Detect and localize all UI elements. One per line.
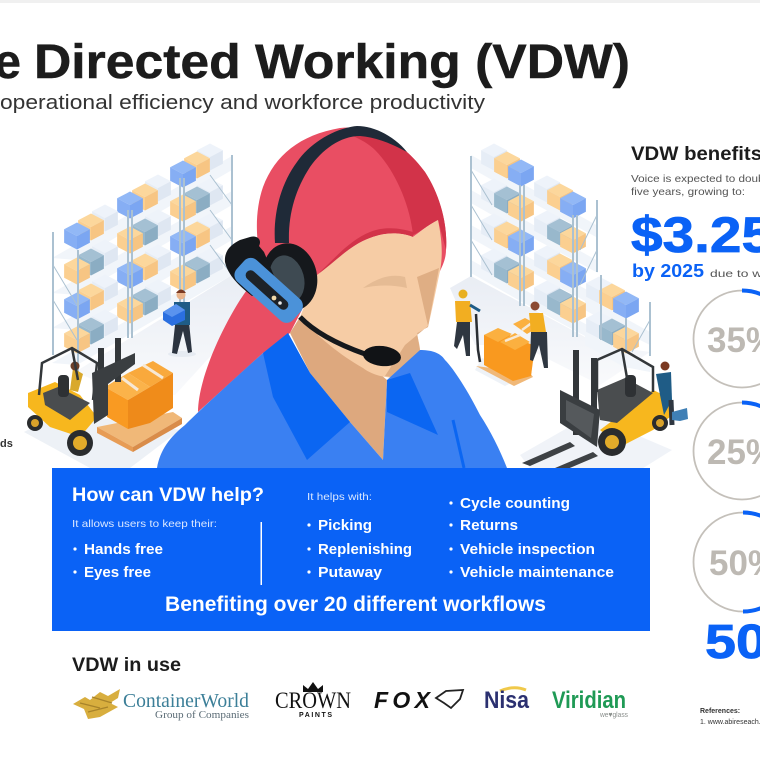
face shade: [385, 268, 439, 378]
illustration: left forklift with boxes: [24, 338, 182, 468]
eye shadow: [363, 276, 407, 288]
left list: Hands free: [84, 541, 163, 558]
collar right: [387, 373, 438, 435]
logo: ContainerWorld: Group of Companies: [155, 709, 249, 721]
right list: Cycle counting: [460, 495, 570, 512]
neck: [290, 317, 387, 460]
logo: Viridian: Viridian: [552, 687, 626, 714]
device top: [225, 237, 280, 296]
illustration: workers with pallet: [454, 290, 548, 386]
device body: [231, 254, 307, 327]
right list: [449, 495, 614, 581]
left list: [73, 541, 163, 581]
middle list: Picking: [318, 517, 372, 534]
middle intro text: It helps with:: [307, 491, 372, 503]
panel heading: How can VDW help?: [72, 485, 264, 506]
stat caption: due to wa: [710, 268, 760, 280]
right list: Vehicle inspection: [460, 541, 595, 558]
shirt: [157, 333, 507, 468]
logo: Viridian: we♥glass: [599, 710, 628, 719]
middle list: Replenishing: [318, 541, 412, 558]
references: [700, 708, 760, 726]
title: Directed Working (VDW): [34, 36, 630, 89]
right list: Returns: [460, 517, 518, 534]
collar left: [263, 333, 350, 460]
hair shadow: [320, 129, 446, 277]
benefits intro text: [631, 173, 760, 198]
logo: Fox: FOX: [374, 687, 432, 713]
left list: Eyes free: [84, 564, 151, 581]
logo: ContainerWorld: [73, 689, 249, 721]
logo: Crown Paints: [275, 682, 351, 719]
middle list: Putaway: [318, 564, 383, 581]
illustration: left warehouse racks: [52, 144, 262, 395]
logo: Crown Paints: CROWN: [275, 688, 351, 713]
microphone: [362, 344, 402, 368]
logo: Nisa: Nisa: [484, 687, 530, 714]
middle list: [307, 517, 412, 581]
heading: VDW benefits: VDW benefits: [631, 144, 760, 165]
illustration: woman with voice headset: [157, 126, 507, 468]
cropped left side text: ds: [0, 438, 13, 450]
subtitle: operational efficiency and workforce productivity: [0, 92, 485, 114]
panel footer statement: Benefiting over 20 different workflows: [165, 593, 546, 616]
benefits intro text: five years, growing to:: [631, 186, 745, 198]
logo: Crown Paints: PAINTS: [299, 712, 332, 719]
ring chart: 35%: [694, 290, 760, 388]
big stat: 50: 50: [705, 616, 760, 669]
heading: VDW in use: VDW in use: [72, 655, 181, 676]
logo: Fox: [374, 687, 463, 713]
mic boom: [300, 317, 365, 354]
left intro text: It allows users to keep their:: [72, 518, 217, 530]
panel: how can VDW help: [52, 468, 650, 631]
ear cup: [257, 238, 323, 316]
face: [300, 220, 442, 378]
ring chart: 50%: [694, 512, 760, 612]
illustration: right forklift: [522, 349, 688, 470]
device slot: [244, 268, 290, 312]
illustration: right warehouse racks: [450, 144, 672, 470]
big stat: market value: $3.25: [631, 207, 760, 263]
right list: Vehicle maintenance: [460, 564, 614, 581]
logo: ContainerWorld: ContainerWorld: [123, 690, 249, 712]
hair: [198, 128, 446, 412]
stat caption: by 2025: [632, 261, 704, 281]
stat caption: [632, 261, 760, 281]
illustration: worker carrying blue box: [163, 290, 196, 357]
ring chart: 25%: [694, 402, 760, 500]
headband: [275, 126, 407, 243]
references: References:: [700, 708, 740, 715]
